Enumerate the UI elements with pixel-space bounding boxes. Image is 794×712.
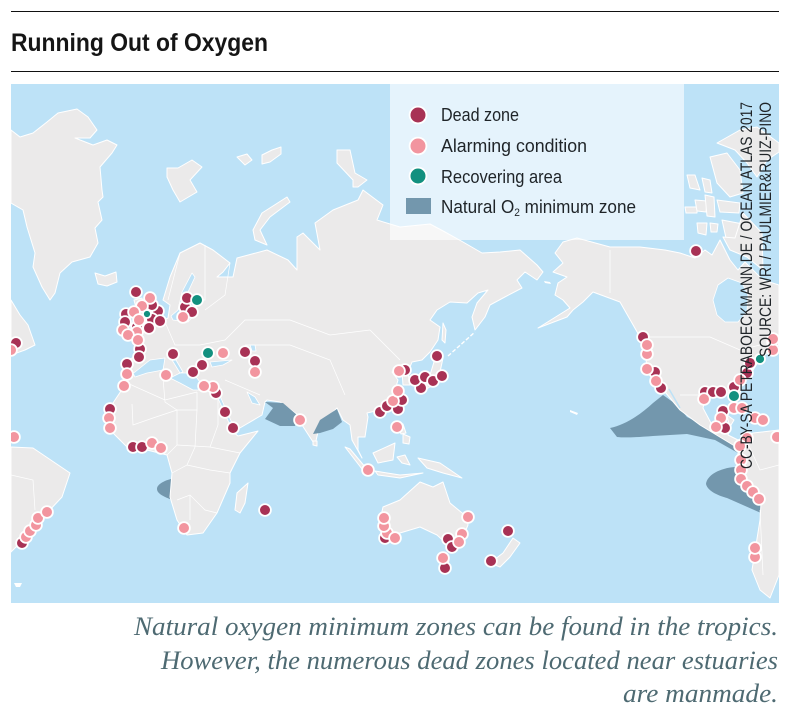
legend: dead zone: Dead zone bbox=[441, 104, 519, 125]
Sakhalin and Kuril islands bbox=[442, 323, 475, 356]
dead zone, alarming and recovering markers bbox=[5, 245, 783, 574]
credit: source: SOURCE: WRI / PAULMIER&RUIZ-PINO bbox=[757, 102, 775, 357]
legend bbox=[390, 84, 684, 240]
Brazil (wrapped) bbox=[11, 447, 70, 552]
world map bbox=[5, 84, 783, 603]
legend: natural O2 minimum zone: Natural O bbox=[441, 196, 520, 217]
legend: dead zone bbox=[410, 104, 519, 125]
legend: natural O2 minimum zone: minimum zone bbox=[520, 196, 636, 217]
Greenland bbox=[11, 109, 117, 300]
Atlantic Canada (wrapped) bbox=[11, 300, 35, 355]
Indian Ocean oxygen minimum zones bbox=[265, 402, 342, 434]
legend: natural O2 minimum zone: 2 bbox=[514, 207, 520, 219]
caption bbox=[133, 612, 778, 708]
Pacific oxygen minimum zones bbox=[610, 395, 765, 513]
Tasmania bbox=[448, 560, 450, 562]
North America and South America bbox=[538, 238, 779, 598]
Southeast Asia islands bbox=[345, 424, 462, 478]
land masses bbox=[11, 109, 779, 598]
Gulf of California bbox=[669, 389, 680, 408]
legend: recovering area: Recovering area bbox=[441, 166, 563, 187]
Canadian Arctic archipelago bbox=[685, 127, 779, 270]
caption: are manmade. bbox=[623, 679, 778, 708]
Atlantic oxygen minimum zone bbox=[157, 479, 171, 500]
Falkland Islands bbox=[14, 583, 22, 587]
Australia bbox=[381, 482, 468, 540]
inland seas bbox=[133, 273, 260, 423]
caption: Natural oxygen minimum zones can be found in the tropics. bbox=[133, 612, 778, 641]
New Zealand bbox=[496, 538, 520, 568]
Eurasia and Africa bbox=[107, 190, 543, 535]
Alaska islands bbox=[544, 281, 551, 284]
legend: natural O2 minimum zone bbox=[406, 198, 636, 216]
Hawaii bbox=[570, 410, 578, 415]
Sri Lanka bbox=[313, 441, 317, 446]
Madagascar bbox=[235, 483, 248, 513]
Arctic islands bbox=[95, 147, 367, 286]
country borders bbox=[11, 245, 779, 575]
caption: However, the numerous dead zones located near estuaries bbox=[160, 646, 778, 675]
title: Running Out of Oxygen bbox=[11, 29, 268, 57]
credit: licence: CC-BY-SA PETRABOECKMANN.DE / OCEAN ATLAS 2017 bbox=[738, 102, 756, 469]
British Isles bbox=[134, 298, 146, 322]
legend: alarming condition: Alarming condition bbox=[441, 135, 587, 156]
Japan bbox=[426, 358, 444, 389]
Hudson Bay bbox=[713, 278, 748, 322]
